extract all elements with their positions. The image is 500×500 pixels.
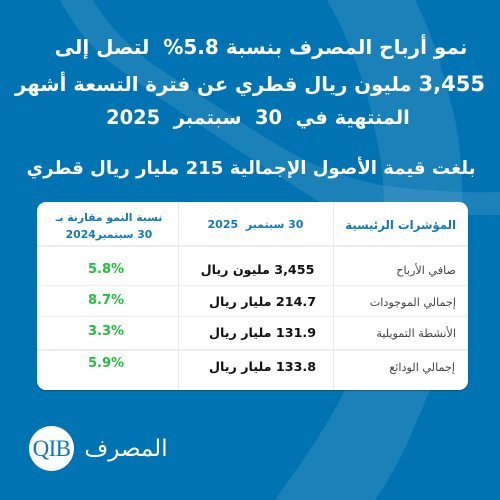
subtitle: بلغت قيمة الأصول الإجمالية 215 مليار ريال قطري — [27, 158, 475, 179]
header: growth: نسبة النمو مقارنة بـ — [56, 211, 162, 224]
row: net profit — [88, 262, 456, 278]
title: نمو أرباح المصرف بنسبة 5.8% لتصل إلى — [55, 35, 467, 59]
logo — [29, 426, 168, 471]
row: total assets: إجمالي الموجودات — [370, 296, 456, 309]
row: financing: الأنشطة التمويلية — [376, 327, 456, 340]
row: total assets — [88, 293, 456, 309]
logo circle: QIB — [33, 436, 70, 461]
row: financing: 131.9 مليار ريال — [209, 325, 316, 340]
header: key indicators: المؤشرات الرئيسية — [345, 218, 456, 232]
results table — [37, 202, 468, 390]
logo circle — [29, 426, 74, 471]
row: net profit: 3,455 مليون ريال — [201, 262, 314, 277]
row: financing — [88, 324, 456, 340]
row: net profit: 5.8% — [88, 262, 124, 277]
title — [14, 34, 485, 129]
header: growth: 30 سبتمبر2024 — [66, 228, 152, 241]
row: total assets: 214.7 مليار ريال — [209, 294, 316, 309]
header: growth — [56, 211, 162, 241]
row: deposits — [88, 356, 455, 374]
row: net profit: صافي الأرباح — [396, 264, 456, 277]
title: 3,455 مليون ريال قطري عن فترة التسعة أشهر — [15, 72, 485, 96]
row: deposits: إجمالي الودائع — [389, 361, 455, 374]
logo wordmark: المصرف — [84, 436, 168, 462]
row: financing: 3.3% — [88, 324, 124, 339]
row: deposits: 133.8 مليار ريال — [209, 359, 316, 374]
row: total assets: 8.7% — [88, 293, 124, 308]
title: المنتهية في 30 سبتمبر 2025 — [106, 106, 410, 129]
header: date: 30 سبتمبر 2025 — [208, 218, 303, 231]
row: deposits: 5.9% — [88, 356, 124, 371]
